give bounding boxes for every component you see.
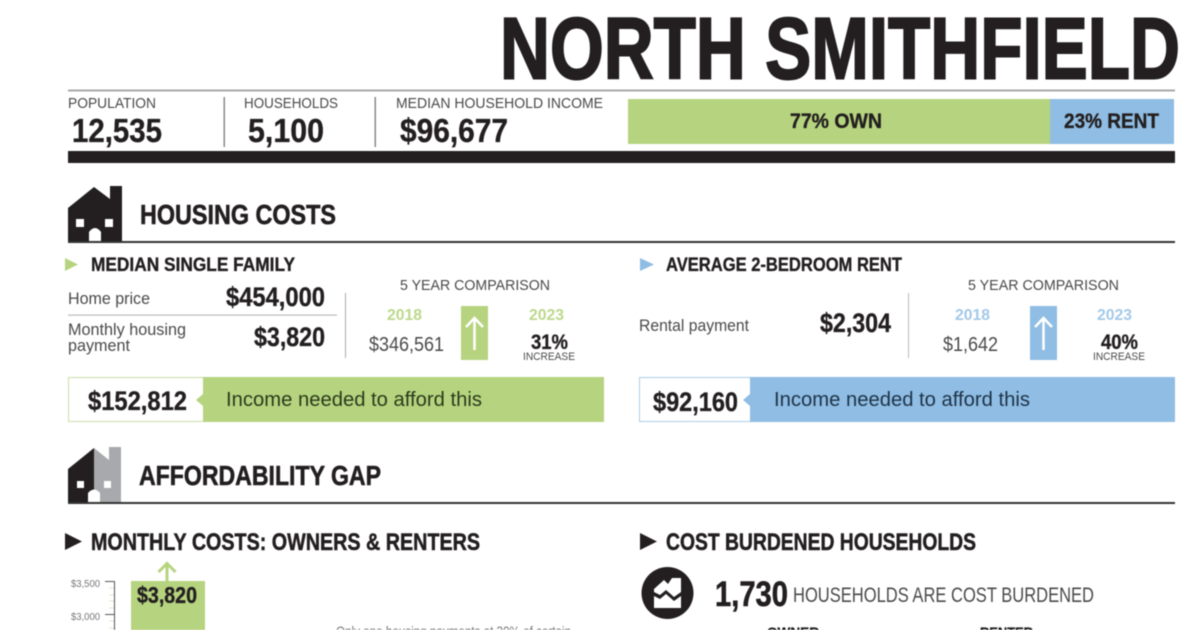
icon: two-tone house bbox=[68, 447, 121, 503]
income needed callout: Income needed to afford this bbox=[774, 389, 1030, 411]
subheading: MEDIAN SINGLE FAMILY bbox=[91, 255, 295, 276]
five year comparison: 2018 bbox=[955, 307, 990, 324]
heading: housing costs: HOUSING COSTS bbox=[140, 199, 336, 230]
statistic bbox=[715, 575, 1094, 614]
own rent bar: 77% OWN bbox=[790, 110, 882, 133]
bar: owner monthly cost: $3,820 bbox=[137, 582, 197, 608]
stat: population: 12,535 bbox=[72, 112, 162, 149]
five year comparison: 5 YEAR COMPARISON bbox=[968, 277, 1119, 294]
stat: households: 5,100 bbox=[248, 112, 324, 149]
five year comparison: $1,642 bbox=[943, 334, 998, 356]
own rent bar bbox=[628, 99, 1174, 144]
stat: households: HOUSEHOLDS bbox=[244, 95, 338, 112]
five year comparison: INCREASE bbox=[523, 351, 575, 363]
icon: burdened house circle bbox=[642, 567, 694, 619]
five year comparison bbox=[943, 277, 1145, 363]
stat: population bbox=[68, 95, 162, 149]
rental payment: Rental payment bbox=[639, 317, 749, 335]
heading: affordability gap: AFFORDABILITY GAP bbox=[139, 460, 381, 491]
statistic: HOUSEHOLDS ARE COST BURDENED bbox=[793, 584, 1094, 607]
monthly housing payment: Monthly housing bbox=[68, 321, 186, 339]
income needed callout bbox=[68, 377, 604, 422]
stat: median household income: MEDIAN HOUSEHOLD INCOME bbox=[396, 95, 603, 112]
five year comparison: 2023 bbox=[529, 307, 564, 324]
subheading: COST BURDENED HOUSEHOLDS bbox=[666, 529, 976, 556]
chart axis: $3,000 bbox=[71, 612, 100, 623]
five year comparison: 40% bbox=[1101, 331, 1138, 354]
chart axis bbox=[71, 579, 114, 630]
statistic: 1,730 bbox=[715, 575, 788, 614]
panel: cost burdened households bbox=[640, 529, 1094, 630]
monthly housing payment bbox=[68, 321, 325, 355]
five year comparison bbox=[369, 277, 575, 363]
five year comparison: 2018 bbox=[387, 307, 422, 324]
stat: households bbox=[244, 95, 338, 149]
stat: median household income bbox=[396, 95, 603, 149]
monthly housing payment: payment bbox=[68, 337, 130, 355]
income needed callout: $92,160 bbox=[653, 387, 738, 417]
panel: median single family bbox=[65, 255, 604, 422]
rental payment bbox=[639, 308, 891, 338]
panel: average 2-bedroom rent bbox=[639, 255, 1175, 422]
five year comparison: $346,561 bbox=[369, 334, 444, 356]
icon: green triangle bbox=[65, 258, 78, 271]
income needed callout bbox=[640, 377, 1175, 422]
income needed callout: Income needed to afford this bbox=[226, 389, 482, 411]
own rent bar: 23% RENT bbox=[1064, 110, 1159, 133]
bar: owner monthly cost bbox=[131, 564, 205, 630]
five year comparison: INCREASE bbox=[1093, 351, 1145, 363]
subheading: MONTHLY COSTS: OWNERS & RENTERS bbox=[91, 529, 480, 556]
subheading: AVERAGE 2-BEDROOM RENT bbox=[666, 255, 902, 276]
monthly housing payment: $3,820 bbox=[254, 322, 325, 352]
icon: black triangle bbox=[65, 533, 82, 550]
five year comparison: 31% bbox=[531, 331, 568, 354]
arrow bbox=[461, 306, 488, 360]
icon: blue triangle bbox=[640, 258, 654, 271]
chart axis: $3,500 bbox=[71, 579, 100, 590]
five year comparison: 5 YEAR COMPARISON bbox=[400, 277, 550, 294]
stat: population: POPULATION bbox=[68, 95, 156, 112]
home price bbox=[68, 282, 325, 312]
income needed callout: $152,812 bbox=[88, 386, 187, 416]
panel: monthly costs bbox=[65, 529, 571, 630]
icon: house bbox=[68, 186, 122, 242]
home price: $454,000 bbox=[226, 282, 325, 312]
home price: Home price bbox=[68, 290, 150, 308]
five year comparison: 2023 bbox=[1097, 307, 1132, 324]
icon: black triangle bbox=[640, 533, 657, 550]
arrow bbox=[1030, 306, 1057, 360]
stat: median household income: $96,677 bbox=[400, 112, 508, 149]
rental payment: $2,304 bbox=[820, 308, 891, 338]
